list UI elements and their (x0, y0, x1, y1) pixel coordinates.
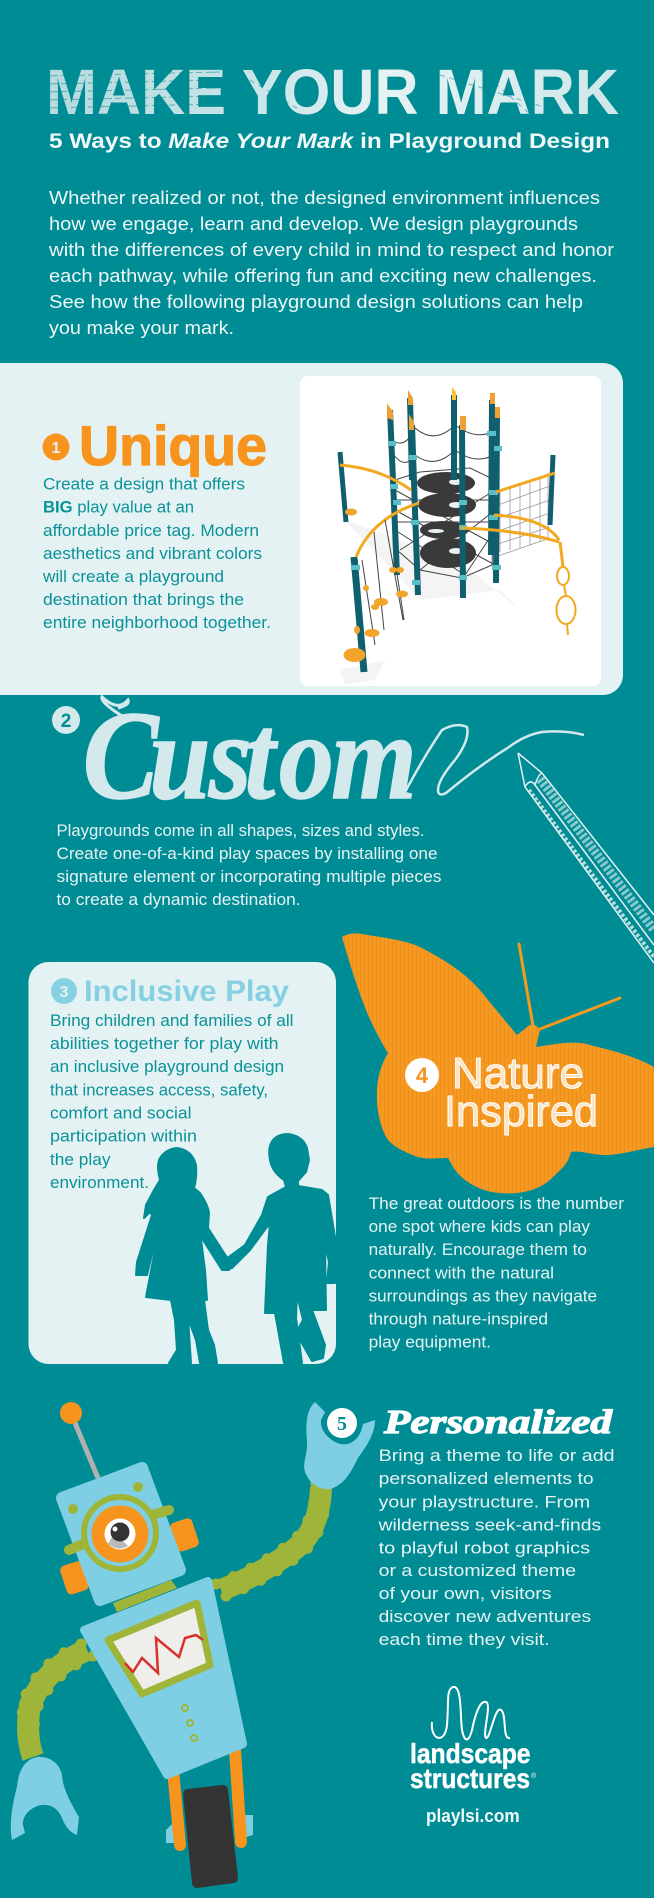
personalized body text: of your own, visitors (379, 1584, 552, 1603)
girl (136, 1148, 232, 1363)
ground shadows (340, 520, 560, 685)
robot legs (166, 1750, 253, 1845)
website: playlsi.com (426, 1806, 520, 1826)
climbing discs (417, 472, 476, 568)
personalized body text: each time they visit. (379, 1630, 550, 1649)
silhouette: girl and boy (136, 1134, 335, 1363)
hanging steps (344, 508, 408, 662)
registered mark: ® (531, 1772, 537, 1780)
custom c loop (102, 697, 128, 716)
nature body text: one spot where kids can play (369, 1217, 590, 1236)
pole tips (387, 387, 500, 430)
number 1 (42, 434, 70, 460)
heading: nature inspired (444, 1049, 598, 1136)
inclusive body text: participation within (50, 1127, 197, 1146)
number 3: 3 (60, 984, 69, 1001)
disc highlights (428, 479, 463, 554)
personalized body text: personalized elements to (379, 1469, 594, 1488)
personalized body text: or a customized theme (379, 1561, 576, 1580)
number 4 (405, 1058, 439, 1092)
heading: nature inspired: Nature (452, 1049, 584, 1098)
unique body text: Create a design that offers (43, 474, 245, 494)
net tower (392, 425, 495, 578)
inclusive body text: that increases access, safety, (50, 1080, 268, 1100)
robot wheel (188, 1790, 233, 1883)
robot antenna (60, 1402, 98, 1478)
robot neck (113, 1580, 177, 1612)
nature body text: play equipment. (369, 1332, 491, 1352)
inclusive body text: Bring children and families of all (50, 1011, 294, 1030)
intro text: you make your mark. (49, 317, 234, 338)
number 3 (51, 978, 77, 1004)
custom body text (56, 821, 442, 909)
unique body text: BIG play value at an (43, 498, 194, 517)
nature body text: through nature-inspired (369, 1310, 548, 1328)
title: MAKE YOUR MARK (46, 56, 619, 128)
inclusive body text: an inclusive playground design (50, 1057, 284, 1076)
intro text: Whether realized or not, the designed environment influences (49, 187, 600, 208)
number 5: 5 (337, 1413, 347, 1435)
intro text: how we engage, learn and develop. We design playgrounds (49, 213, 578, 234)
number 2 (52, 706, 80, 734)
unique body text: will create a playground (42, 567, 224, 586)
intro text: with the differences of every child in mind to respect and honor (48, 239, 614, 260)
panel: inclusive play (28, 962, 336, 1364)
inclusive body text: the play (50, 1150, 111, 1169)
robot head (62, 1468, 180, 1600)
robot right claw (304, 1402, 375, 1489)
robot left claw (11, 1757, 79, 1840)
number 2: 2 (61, 711, 71, 732)
butterfly wings (342, 933, 654, 1193)
poles (340, 395, 553, 672)
orange rails (340, 465, 576, 635)
unique body text: affordable price tag. Modern (43, 521, 259, 540)
number 1: 1 (52, 440, 61, 457)
net on right (498, 473, 550, 556)
logo wordmark: structures (410, 1763, 530, 1794)
robot screen (108, 1603, 210, 1694)
custom script word: s (208, 691, 252, 825)
robot ears (59, 1517, 200, 1596)
inclusive body text: abilities together for play with (50, 1034, 278, 1053)
custom script word: o (279, 691, 334, 825)
icon: butterfly (342, 933, 654, 1193)
nature body text: surroundings as they navigate (369, 1286, 597, 1306)
nature body text (369, 1194, 624, 1352)
heading: personalized: Personalized (383, 1404, 613, 1441)
inclusive body text: comfort and social (50, 1104, 192, 1122)
icon: chalk pencil (518, 753, 654, 963)
personalized body text: Bring a theme to life or add (379, 1446, 615, 1465)
illustration: robot (11, 1402, 375, 1883)
robot head dots (68, 1482, 143, 1514)
intro text: each pathway, while offering fun and exciting new challenges. (49, 265, 597, 286)
personalized body text: wilderness seek-and-finds (377, 1516, 601, 1534)
logo squiggle (432, 1687, 510, 1739)
nature body text: connect with the natural (369, 1264, 554, 1282)
custom body text: Playgrounds come in all shapes, sizes and styles. (56, 821, 424, 840)
heading: unique: Unique (79, 414, 267, 477)
hanging ropes (362, 520, 404, 645)
unique body text: destination that brings the (43, 590, 244, 609)
intro text (48, 187, 614, 338)
robot goggle straps (69, 1510, 169, 1550)
custom script word: t (245, 691, 279, 825)
subtitle: 5 Ways to Make Your Mark in Playground Design (49, 129, 610, 153)
robot eye (84, 1497, 156, 1569)
logo: landscape structures (410, 1687, 537, 1794)
custom script word: m (331, 691, 417, 825)
personalized body text: your playstructure. From (379, 1492, 590, 1511)
butterfly antennae (519, 944, 620, 1029)
inclusive body text: environment. (50, 1173, 149, 1192)
robot buttons (182, 1705, 197, 1741)
custom body text: signature element or incorporating multiple pieces (56, 867, 442, 886)
heading: inclusive play: Inclusive Play (84, 975, 289, 1008)
number 5 (327, 1408, 357, 1438)
number 4: 4 (416, 1063, 429, 1088)
inclusive body text (50, 1011, 294, 1192)
nature body text: naturally. Encourage them to (369, 1240, 587, 1259)
nature body text: The great outdoors is the number (369, 1194, 624, 1213)
personalized body text: discover new adventures (379, 1607, 591, 1626)
custom script word: u (149, 691, 210, 825)
personalized body text (377, 1446, 615, 1649)
panel: unique (0, 363, 623, 695)
pole collars (351, 431, 502, 585)
logo wordmark (410, 1738, 530, 1794)
personalized body text: to playful robot graphics (379, 1538, 590, 1558)
unique body text (42, 474, 271, 632)
intro text: See how the following playground design solutions can help (49, 291, 583, 312)
photo card: playstructure (300, 376, 601, 686)
unique body text: entire neighborhood together. (43, 613, 271, 632)
boy (222, 1134, 335, 1363)
robot left arm (22, 1644, 93, 1763)
heading: nature inspired: Inspired (444, 1087, 598, 1136)
robot body (84, 1581, 243, 1775)
unique body text: aesthetics and vibrant colors (43, 544, 262, 563)
logo wordmark: landscape (410, 1738, 530, 1769)
custom body text: to create a dynamic destination. (56, 890, 300, 909)
custom flourish (405, 725, 584, 794)
custom script word: C (83, 686, 160, 825)
custom body text: Create one-of-a-kind play spaces by installing one (56, 844, 438, 863)
heading: custom (83, 686, 584, 825)
robot right arm (216, 1481, 326, 1596)
